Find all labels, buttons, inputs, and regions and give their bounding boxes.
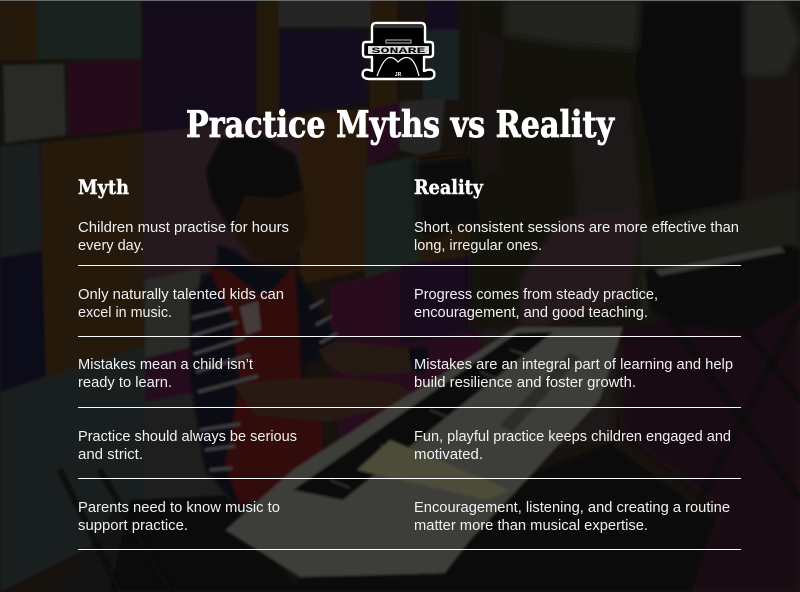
reality 3: Mistakes are an integral part of learning and help [414, 357, 733, 373]
myth 4: and strict. [78, 447, 143, 463]
dark equipment [430, 445, 715, 592]
myth 2 [78, 287, 284, 321]
myth 2: excel in music. [78, 305, 172, 321]
reality 2 [414, 287, 658, 321]
logo: Sonare piano badge [363, 23, 434, 79]
reality 1: long, irregular ones. [414, 238, 542, 254]
reality 4 [414, 429, 731, 463]
heading: Reality: Reality [414, 175, 484, 199]
boy [232, 190, 308, 262]
myth 1: Children must practise for hours [78, 220, 289, 236]
logo: Sonare piano badge: JR [395, 72, 402, 78]
reality 5: Encouragement, listening, and creating a routine [414, 500, 730, 516]
reality 2: encouragement, and good teaching. [414, 305, 648, 321]
panel: reality column [414, 175, 739, 534]
reality 3: build resilience and foster growth. [414, 375, 636, 391]
yamaha keyboard [645, 245, 800, 332]
keyboard [225, 327, 623, 577]
myth 5 [78, 500, 280, 534]
reality 4: motivated. [414, 447, 483, 463]
title: Practice Myths vs Reality [186, 104, 615, 146]
reality 5 [414, 500, 730, 534]
reality 3 [414, 357, 733, 391]
myth 3 [78, 357, 253, 391]
myth 4: Practice should always be serious [78, 429, 297, 445]
reality 1: Short, consistent sessions are more effective than [414, 220, 739, 236]
reality 5: matter more than musical expertise. [414, 518, 648, 534]
myth 1: every day. [78, 238, 144, 254]
reality 1 [414, 220, 739, 254]
logo: Sonare piano badge: SONARE [372, 46, 426, 56]
myth 5: support practice. [78, 518, 188, 534]
reality 4: Fun, playful practice keeps children engaged and [414, 429, 731, 445]
reality 2: Progress comes from steady practice, [414, 287, 658, 303]
people background [470, 0, 800, 330]
myth 3: Mistakes mean a child isn’t [78, 357, 253, 373]
heading: Myth: Myth [78, 175, 129, 199]
myth 1 [78, 220, 289, 254]
myth 5: Parents need to know music to [78, 500, 280, 516]
myth 2: Only naturally talented kids can [78, 287, 284, 303]
panel: myth column [78, 175, 297, 534]
myth 3: ready to learn. [78, 375, 172, 391]
myth 4 [78, 429, 297, 463]
